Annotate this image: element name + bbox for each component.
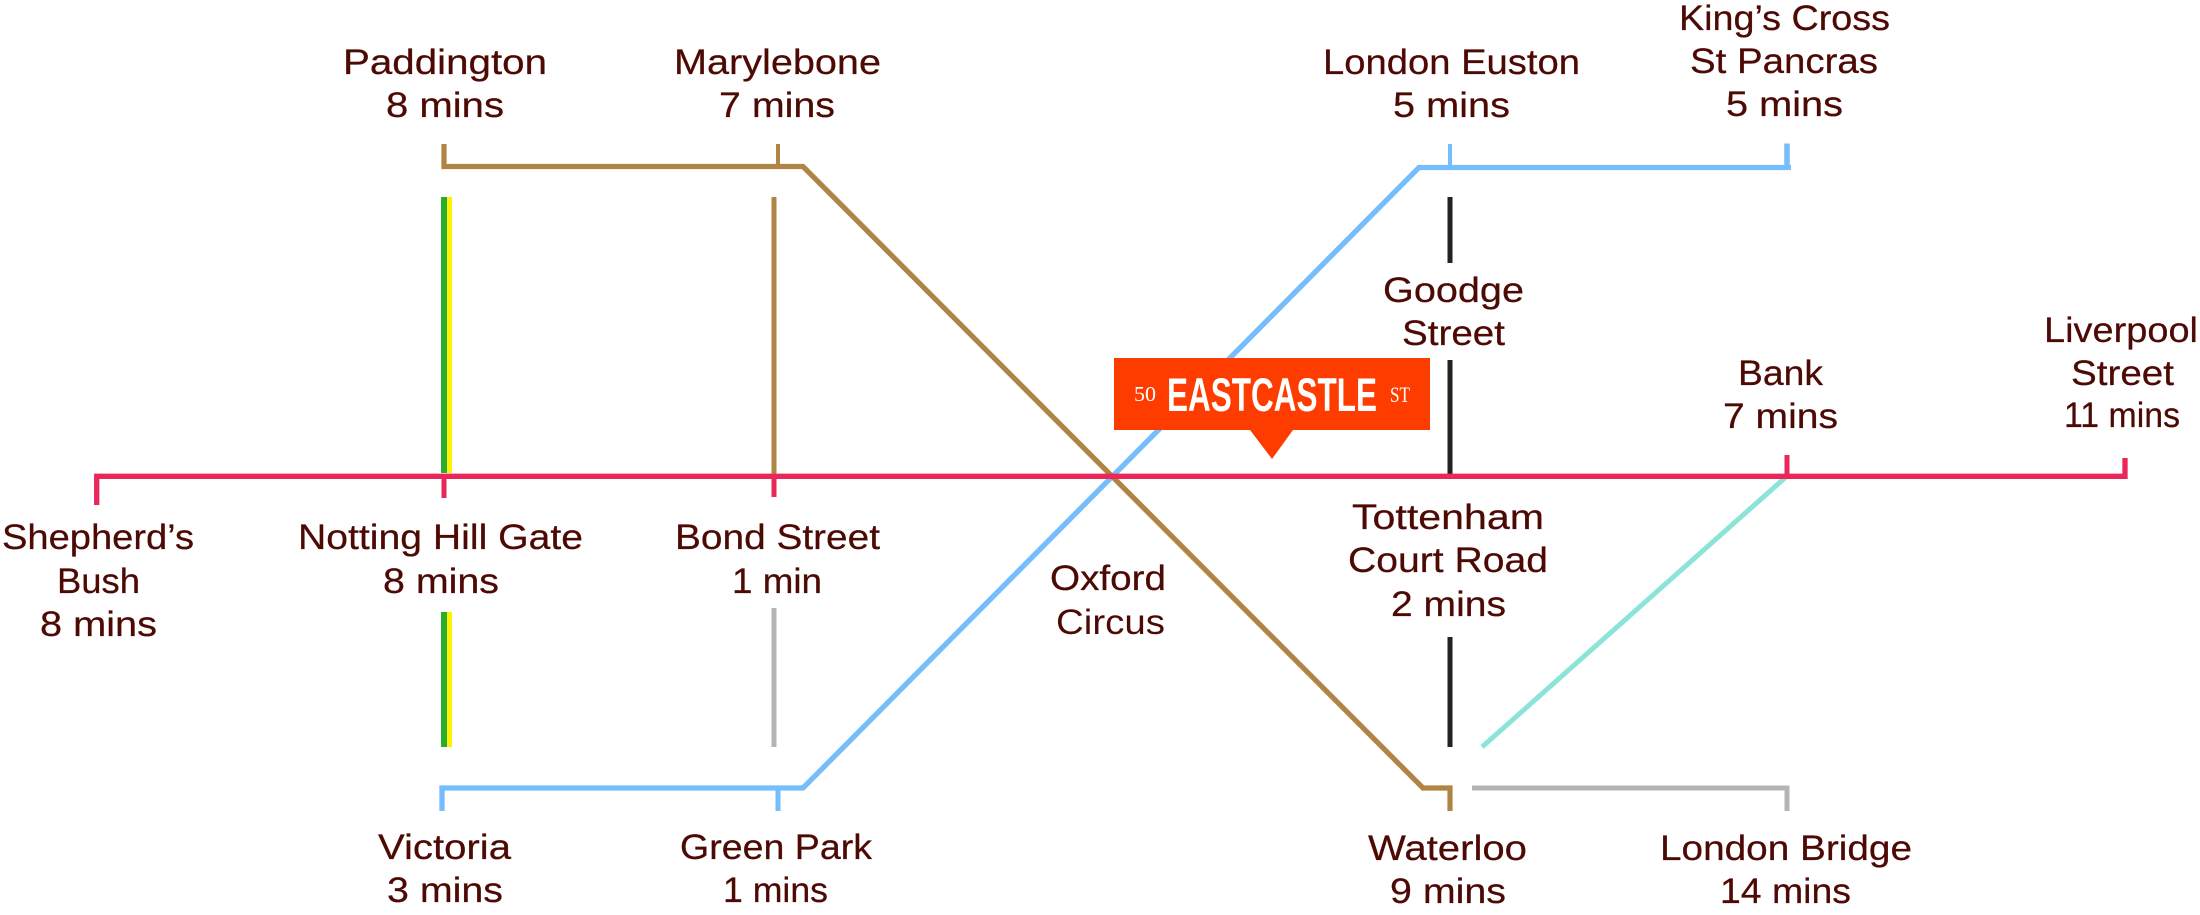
station: Green Park: Green Park [680,828,873,867]
station: Tottenham Court Road [1348,498,1548,624]
station: Victoria: 3 mins [387,871,503,910]
station: Liverpool Street: Liverpool [2044,311,2198,350]
station: Goodge Street: Goodge [1383,271,1524,310]
line: Victoria blue [442,144,1791,811]
station: Shepherd's Bush [2,518,194,644]
line: Northern black upper [1448,197,1452,263]
station: Notting Hill Gate: Notting Hill Gate [298,518,583,557]
line: Jubilee grey at Bond Street [772,608,776,747]
line: District and Circle stripe lower [441,612,452,747]
station: London Euston: London Euston [1323,43,1580,82]
station: Bond Street: 1 min [732,562,822,601]
station: Tottenham Court Road: 2 mins [1391,585,1506,624]
station: King's Cross St Pancras: St Pancras [1690,42,1878,81]
station: Liverpool Street: Street [2071,354,2174,393]
station: London Bridge: 14 mins [1720,872,1851,911]
station: Marylebone [674,43,881,125]
station: London Bridge [1660,829,1912,911]
station: Notting Hill Gate [298,518,583,601]
station: Goodge Street [1383,271,1524,353]
station: Shepherd's Bush: 8 mins [40,605,157,644]
station: Marylebone: Marylebone [674,43,881,82]
station: Oxford Circus [1050,559,1166,642]
callout: 50 Eastcastle St [1114,358,1430,459]
station: Paddington: 8 mins [386,86,504,125]
station: Tottenham Court Road: Tottenham [1352,498,1544,537]
callout: 50 Eastcastle St: ST [1390,382,1410,407]
line: Bakerloo vertical at Bond Street [772,197,776,474]
station: Victoria: Victoria [378,828,512,867]
station: Notting Hill Gate: 8 mins [383,562,499,601]
station: Paddington [343,43,547,125]
station: Paddington: Paddington [343,43,547,82]
station: London Bridge: London Bridge [1660,829,1912,868]
station: Oxford Circus: Oxford [1050,559,1166,598]
line: Jubilee grey to London Bridge [1472,788,1787,811]
station: Bank: Bank [1738,354,1824,393]
station: Oxford Circus: Circus [1056,603,1165,642]
station: Tottenham Court Road: Court Road [1348,541,1548,580]
station: Marylebone: 7 mins [719,86,835,125]
line: Central red [97,455,2125,505]
station: Waterloo: Waterloo [1368,829,1527,868]
station: Shepherd's Bush: Shepherd’s [2,518,194,557]
station: King's Cross St Pancras [1679,0,1890,124]
station: Waterloo: 9 mins [1390,872,1506,911]
line: District and Circle stripe upper [441,197,452,473]
station: Bond Street [675,518,880,601]
station: Liverpool Street: 11 mins [2064,396,2180,435]
station: Shepherd's Bush: Bush [57,562,140,601]
line: Northern black middle [1448,360,1452,474]
station: Bank: 7 mins [1723,397,1838,436]
station: King's Cross St Pancras: King’s Cross [1679,0,1890,38]
station: Bond Street: Bond Street [675,518,880,557]
station: Green Park: 1 mins [723,871,828,910]
callout: 50 Eastcastle St: 50 [1134,382,1156,406]
station: Waterloo [1368,829,1527,911]
callout: 50 Eastcastle St: EASTCASTLE [1167,368,1377,421]
station: King's Cross St Pancras: 5 mins [1726,85,1843,124]
station: Liverpool Street [2044,311,2198,435]
station: London Euston: 5 mins [1393,86,1510,125]
line: Waterloo and City teal [1482,476,1787,747]
station: Bank [1723,354,1838,436]
station: Green Park [680,828,873,910]
line: Bakerloo brown [444,144,1450,811]
line: Northern black lower [1448,637,1452,747]
station: London Euston [1323,43,1580,125]
station: Goodge Street: Street [1402,314,1505,353]
station: Victoria [378,828,512,910]
